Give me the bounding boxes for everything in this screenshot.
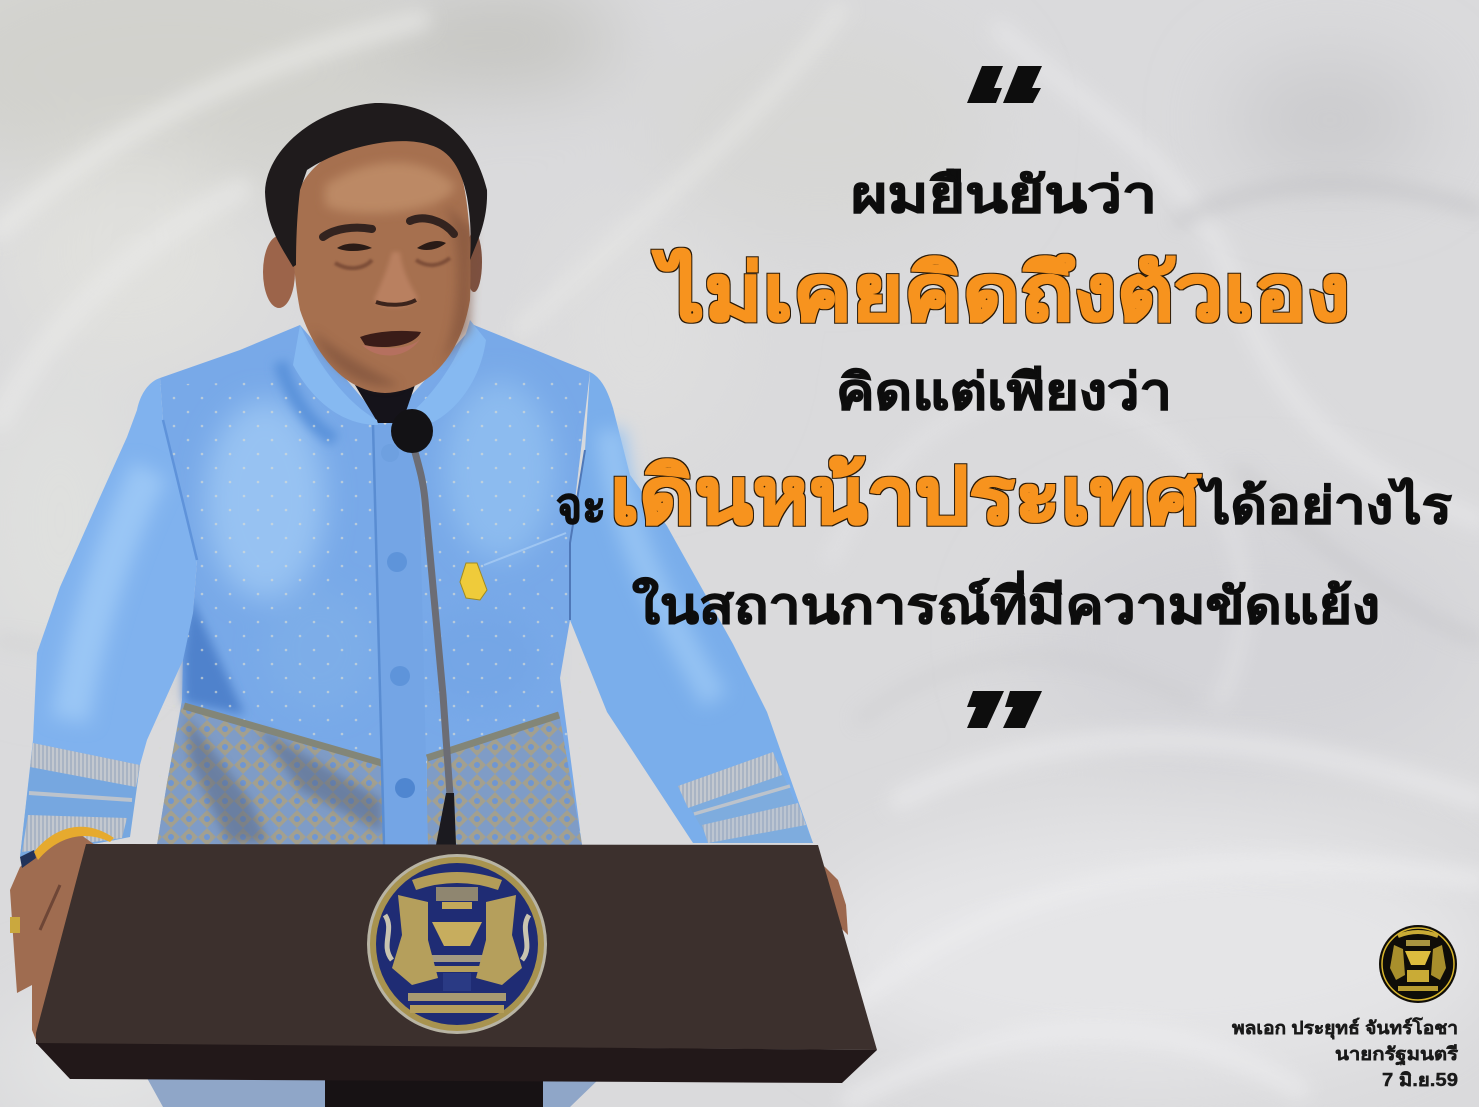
gold wrist band: [34, 827, 114, 860]
line 3: คิดแต่เพียงว่า: [836, 364, 1172, 420]
neck shadow: [355, 385, 415, 423]
brows: [323, 218, 454, 237]
line 4: เดินหน้าประเทศ: [610, 452, 1202, 540]
icon: closing quote mark: [967, 691, 1042, 728]
line 4: [556, 452, 1452, 540]
face: [293, 137, 470, 393]
left hand: [10, 832, 95, 1040]
navy cuff lining: [20, 850, 36, 868]
quote text: [556, 167, 1452, 634]
gold ring: [10, 917, 20, 933]
button: [387, 552, 407, 572]
photo: man in blue silk jacket at podium: [10, 103, 877, 1107]
button: [381, 444, 399, 462]
line 1: ผมยืนยันว่า: [851, 167, 1157, 223]
line 4: จะ: [556, 478, 606, 534]
microphone: [391, 409, 456, 845]
government seal: [1379, 925, 1457, 1003]
left ear: [263, 236, 295, 308]
hair: [265, 103, 487, 267]
icon: opening quote mark: [967, 66, 1042, 103]
left cuff: [20, 743, 140, 857]
podium emblem: [367, 854, 547, 1034]
woven band at jacket hem: [157, 703, 582, 845]
attribution: [1232, 1017, 1458, 1090]
placket with buttons: [373, 425, 428, 845]
eyes: [337, 241, 446, 251]
mandarin collar: [293, 320, 486, 428]
head: [263, 103, 487, 393]
collar-side fold shadow: [280, 362, 335, 440]
gold lapel pin: [460, 563, 487, 600]
mouth: [360, 331, 421, 347]
name: พลเอก ประยุทธ์ จันทร์โอชา: [1232, 1017, 1458, 1040]
left sleeve: [20, 378, 197, 857]
right hand: [824, 866, 848, 935]
jacket body: [143, 325, 600, 845]
button: [395, 778, 415, 798]
position: นายกรัฐมนตรี: [1335, 1044, 1458, 1066]
right cuff: [678, 752, 813, 843]
right ear: [466, 232, 482, 292]
button: [390, 666, 410, 686]
nose: [374, 252, 418, 307]
podium: [36, 844, 877, 1083]
right sleeve: [570, 372, 813, 843]
pocket line: [484, 533, 566, 565]
line 2 highlighted: ไม่เคยคิดถึงตัวเอง: [652, 248, 1350, 337]
date: 7 มิ.ย.59: [1382, 1070, 1458, 1090]
body shadow beside left arm: [183, 595, 245, 715]
line 5: ในสถานการณ์ที่มีความขัดแย้ง: [632, 571, 1380, 634]
podium stem: [325, 1075, 543, 1107]
jacket hem below podium: [147, 1078, 600, 1107]
line 4: ได้อย่างไร: [1196, 477, 1452, 534]
